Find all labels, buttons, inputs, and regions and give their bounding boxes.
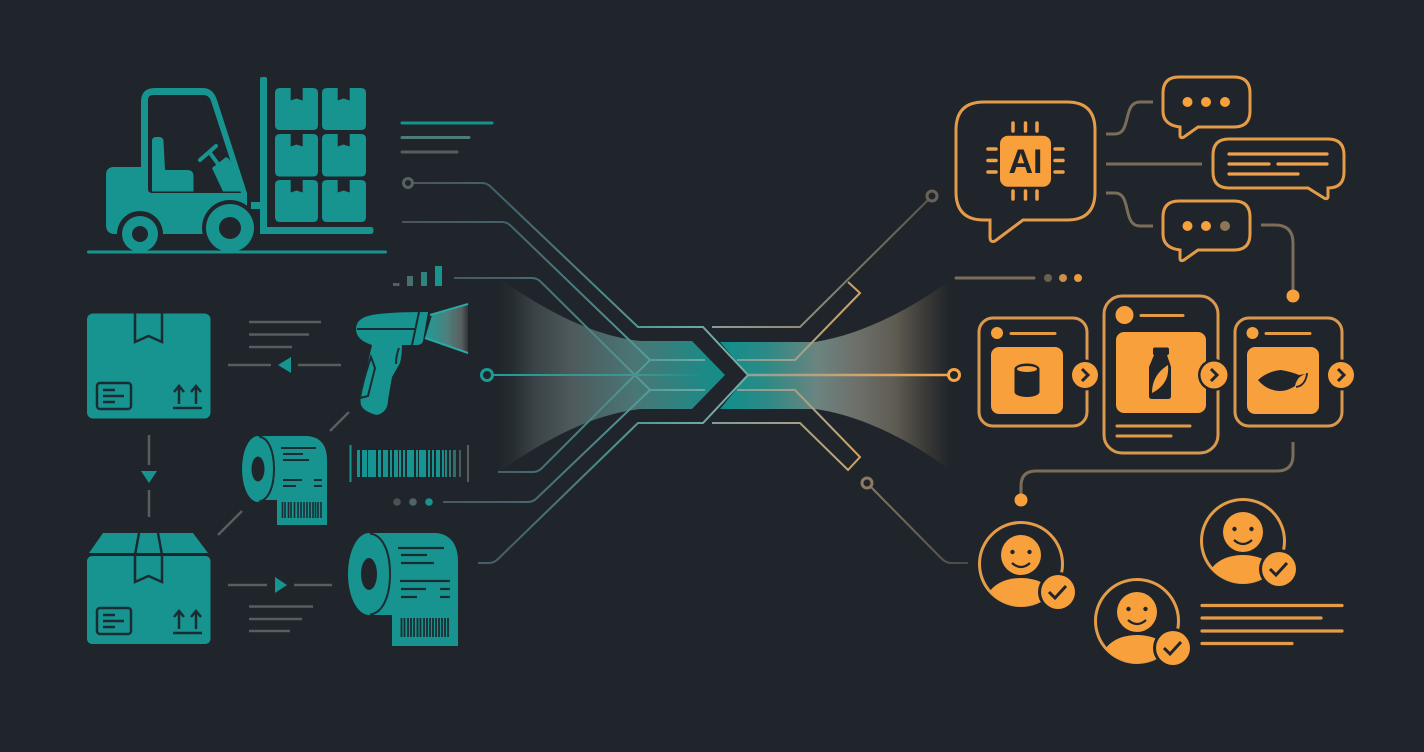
signal bars icon [393,266,442,286]
box label [97,383,131,409]
center line: teal input [482,370,700,380]
forklift mast and fork [260,77,374,234]
can icon [1014,364,1040,397]
barcode scanner [356,304,468,415]
text lines below flow arrow [249,606,313,631]
flow arrow: scanner to box [228,357,341,373]
customer avatar: left [978,521,1075,609]
this way up arrows [173,386,202,408]
bottle icon [1149,348,1171,399]
customer avatar: center [1094,578,1190,665]
connector: products to customers [1014,442,1293,506]
label roll: large [348,533,458,646]
product card: leaf [1235,318,1342,426]
product card: bottle [1104,296,1218,453]
connector slash: scanner to roll [330,412,349,431]
infographic canvas [87,76,1354,665]
circuit lines: left inputs [402,183,748,563]
scanner beam [425,304,468,354]
forklift ground line [87,250,387,254]
open box label [97,608,131,634]
large roll printed lines [398,548,450,597]
divider with dots [956,274,1082,282]
central funnel: right gradient band [720,280,950,470]
chat bubble: dots top [1163,77,1250,138]
scanner body [356,312,428,415]
barcode strip [350,445,468,482]
central funnel: left gradient band [497,277,725,473]
flow arrow: box to roll [228,577,332,593]
circuit lines: right outputs [712,200,968,563]
AI chip [1000,136,1051,187]
dots beside barcode [393,498,433,506]
product card: can [979,318,1087,426]
text lines beside customers [1202,606,1342,644]
package: closed box [87,313,210,418]
leaf icon [1258,370,1306,391]
open box up arrows [173,611,202,633]
scanner detail lines [357,312,419,398]
roll printed lines [281,448,322,486]
text lines above scanner arrow [249,322,321,347]
label roll: small [242,436,327,525]
forklift with stacked boxes [87,77,387,260]
chat bubble: dots bottom [1163,201,1250,261]
AI chip pins [988,123,1063,199]
forklift body and cabin [106,88,247,234]
package: open box [87,533,210,644]
AI speech bubble [956,102,1095,242]
connector arrow: box to box [141,435,157,517]
carousel arrow buttons [1070,359,1356,391]
open box tape [135,533,162,582]
roll barcode [282,502,321,518]
center line: orange output [748,370,960,380]
node circles [404,178,937,488]
connector slash: roll to box [218,511,242,535]
stacked cartons [275,88,366,222]
forklift wheels [117,211,163,257]
chat bubble: text [1213,139,1344,199]
customer avatar: right [1200,498,1296,586]
connector: chat to products [1261,225,1300,302]
large roll barcode [402,618,448,637]
AI label: AI [1008,143,1042,181]
text placeholder lines beside forklift [402,123,492,152]
chat connectors [1106,102,1202,226]
box tape [135,313,162,342]
